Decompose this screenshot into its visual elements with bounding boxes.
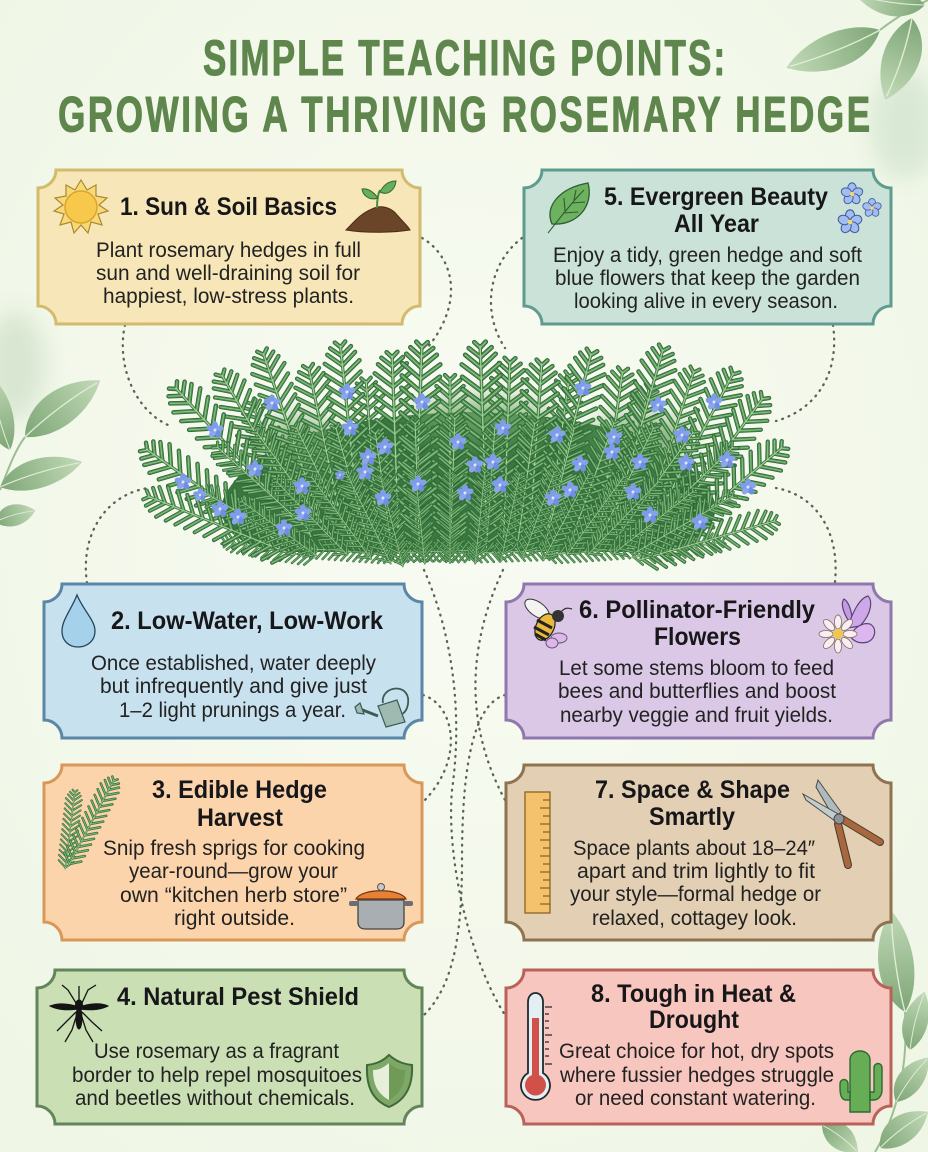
body text bbox=[570, 837, 821, 930]
hedge back sprigs bbox=[133, 340, 796, 567]
body text: or need constant watering. bbox=[575, 1087, 816, 1110]
hedge front sprigs bbox=[139, 465, 782, 574]
title: GROWING A THRIVING ROSEMARY HEDGE bbox=[58, 87, 870, 143]
body text: Let some stems bloom to feed bbox=[559, 657, 834, 680]
panel 8: tough in heat and drought bbox=[506, 970, 891, 1124]
body text: nearby veggie and fruit yields. bbox=[560, 704, 833, 727]
body text bbox=[559, 1040, 834, 1110]
icon: green leaf bbox=[548, 183, 589, 233]
body text: Great choice for hot, dry spots bbox=[559, 1040, 834, 1063]
body text: border to help repel mosquitoes bbox=[72, 1064, 362, 1087]
body text: blue flowers that keep the garden bbox=[555, 267, 860, 290]
foliage: top right corner bbox=[781, 0, 928, 180]
icon: garden shears bbox=[803, 780, 880, 865]
body text: Use rosemary as a fragrant bbox=[94, 1040, 339, 1063]
panel 3: edible hedge harvest bbox=[44, 765, 422, 940]
icon: water drop bbox=[62, 595, 95, 647]
heading: 1. Sun & Soil Basics bbox=[120, 193, 337, 221]
foliage: left side bbox=[0, 310, 109, 531]
heading: Harvest bbox=[197, 804, 284, 832]
hedge foliage mass bbox=[221, 412, 715, 552]
heading: 2. Low-Water, Low-Work bbox=[111, 607, 383, 635]
icon: blue flowers bbox=[837, 183, 882, 235]
body text: 1–2 light prunings a year. bbox=[119, 699, 346, 722]
icon: sun bbox=[54, 180, 108, 233]
body text: and beetles without chemicals. bbox=[75, 1087, 355, 1110]
icon: thermometer bbox=[521, 993, 552, 1100]
body text bbox=[96, 239, 361, 308]
body text: Once established, water deeply bbox=[91, 652, 376, 675]
body text bbox=[558, 657, 836, 727]
heading bbox=[579, 596, 815, 651]
icon: ruler bbox=[525, 792, 550, 913]
panel 5: evergreen beauty bbox=[524, 170, 891, 324]
heading: 4. Natural Pest Shield bbox=[117, 983, 359, 1011]
body text: Snip fresh sprigs for cooking bbox=[103, 837, 365, 860]
body text: your style—formal hedge or bbox=[570, 883, 821, 906]
heading: 7. Space & Shape bbox=[595, 776, 790, 804]
body text bbox=[91, 652, 376, 722]
heading: 3. Edible Hedge bbox=[152, 776, 327, 804]
dotted connectors bbox=[86, 238, 836, 1016]
rosemary hedge illustration bbox=[133, 340, 796, 574]
body text: year-round—grow your bbox=[129, 860, 338, 883]
heading: Drought bbox=[649, 1006, 740, 1034]
heading bbox=[591, 980, 796, 1034]
body text: Space plants about 18–24″ bbox=[573, 837, 816, 860]
hedge tonal blotches bbox=[260, 400, 690, 471]
icon: bee bbox=[522, 595, 572, 648]
heading bbox=[595, 776, 790, 831]
foliage: bottom right corner bbox=[816, 908, 928, 1152]
body text: Enjoy a tidy, green hedge and soft bbox=[553, 244, 862, 267]
panel 7: space and shape smartly bbox=[506, 765, 891, 940]
panel 1: sun and soil basics bbox=[38, 170, 420, 324]
icon: cactus bbox=[840, 1051, 882, 1112]
icon: watering can bbox=[355, 689, 408, 727]
body text: bees and butterflies and boost bbox=[558, 680, 836, 703]
title: SIMPLE TEACHING POINTS: bbox=[203, 31, 725, 87]
heading bbox=[152, 776, 327, 832]
panel 2: low water low work bbox=[44, 584, 422, 738]
body text: where fussier hedges struggle bbox=[559, 1064, 834, 1087]
icon: shield bbox=[367, 1055, 412, 1107]
heading: Smartly bbox=[649, 803, 735, 831]
icon: rosemary sprig bbox=[57, 773, 124, 871]
body text: own “kitchen herb store” bbox=[120, 884, 347, 907]
body text: relaxed, cottagey look. bbox=[592, 907, 797, 930]
heading: All Year bbox=[674, 210, 759, 238]
body text bbox=[103, 837, 365, 930]
panel 4: natural pest shield bbox=[37, 970, 422, 1124]
body text bbox=[72, 1040, 362, 1110]
icon: soil with sprout bbox=[346, 181, 410, 232]
heading: 5. Evergreen Beauty bbox=[604, 183, 828, 211]
hedge flowers bbox=[174, 379, 757, 537]
title bbox=[58, 31, 870, 143]
panel 6: pollinator friendly flowers bbox=[506, 584, 891, 738]
body text: but infrequently and give just bbox=[100, 675, 367, 698]
body text: apart and trim lightly to fit bbox=[577, 860, 815, 883]
icon: butterfly and daisy bbox=[819, 596, 875, 653]
body text: happiest, low-stress plants. bbox=[103, 285, 354, 308]
hedge middle sprigs bbox=[206, 415, 744, 561]
hedge bottom sprigs bbox=[220, 532, 727, 567]
body text bbox=[553, 244, 862, 313]
heading: 8. Tough in Heat & bbox=[591, 980, 796, 1008]
heading bbox=[604, 183, 828, 238]
heading: Flowers bbox=[654, 623, 741, 651]
icon: cooking pot bbox=[349, 884, 413, 929]
icon: mosquito bbox=[50, 985, 108, 1042]
heading: 6. Pollinator-Friendly bbox=[579, 596, 815, 624]
body text: looking alive in every season. bbox=[574, 290, 838, 313]
body text: sun and well-draining soil for bbox=[96, 262, 360, 285]
body text: Plant rosemary hedges in full bbox=[96, 239, 361, 262]
body text: right outside. bbox=[174, 907, 295, 930]
